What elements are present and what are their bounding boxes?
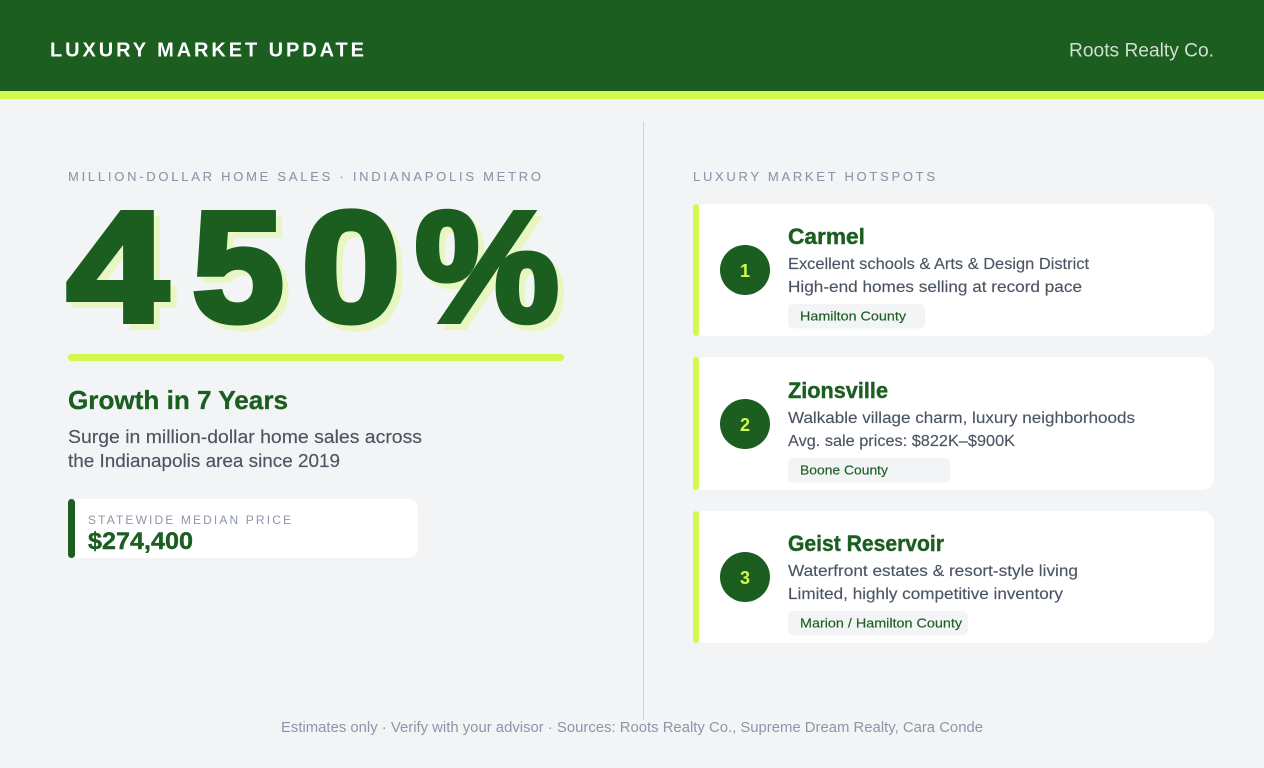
county tag	[788, 304, 925, 328]
accent underline	[68, 354, 564, 361]
Geist Reservoir text: Waterfront estates & resort-style living	[788, 563, 1078, 580]
brand name: Roots Realty Co.	[1069, 40, 1214, 62]
hotspots label: LUXURY MARKET HOTSPOTS	[693, 169, 935, 184]
Zionsville text: Walkable village charm, luxury neighborhoods	[788, 410, 1135, 427]
Zionsville text	[788, 378, 1135, 450]
Geist Reservoir text	[788, 531, 1078, 603]
Carmel text: High-end homes selling at record pace	[788, 279, 1082, 296]
eyebrow label: MILLION-DOLLAR HOME SALES · INDIANAPOLIS METRO	[68, 169, 541, 184]
rank badge 1: 1	[740, 261, 750, 281]
median price card	[68, 499, 418, 558]
big number shadow and value: 5	[198, 186, 290, 361]
description: the Indianapolis area since 2019	[68, 451, 340, 471]
Carmel text: Carmel	[788, 224, 865, 249]
big number shadow and value: %	[415, 180, 559, 355]
divider	[643, 122, 644, 720]
subheading: Growth in 7 Years	[68, 385, 288, 415]
big number shadow and value: 0	[308, 186, 406, 361]
panel: left statistic	[67, 169, 565, 558]
rank badge 1	[720, 245, 770, 295]
header band	[0, 0, 1264, 99]
median label: STATEWIDE MEDIAN PRICE	[88, 513, 291, 527]
county tag	[788, 458, 950, 482]
Carmel text	[788, 224, 1090, 296]
big number shadow and value: 5	[192, 180, 284, 355]
big number shadow and value: %	[421, 186, 565, 361]
card: Zionsville	[693, 357, 1214, 490]
Zionsville text: Avg. sale prices: $822K–$900K	[788, 433, 1015, 450]
Zionsville text: Zionsville	[788, 378, 888, 403]
big number shadow and value: 0	[302, 180, 400, 355]
county tag: Hamilton County	[800, 308, 907, 324]
median value: $274,400	[88, 528, 193, 555]
county tag: Boone County	[800, 462, 889, 478]
footer note: Estimates only · Verify with your advisor · Sources: Roots Realty Co., Supreme Dream Realty, Cara Conde	[281, 719, 983, 736]
card: Carmel	[693, 204, 1214, 336]
Geist Reservoir text: Geist Reservoir	[788, 531, 944, 556]
header title: LUXURY MARKET UPDATE	[50, 40, 364, 62]
panel: hotspots	[693, 169, 1214, 643]
rank badge 2: 2	[740, 415, 750, 435]
big number shadow and value: 4	[73, 186, 174, 361]
big number shadow and value	[67, 180, 565, 361]
rank badge 2	[720, 399, 770, 449]
Carmel text: Excellent schools & Arts & Design District	[788, 256, 1090, 273]
rank badge 3: 3	[740, 568, 750, 588]
county tag	[788, 611, 968, 636]
description	[68, 427, 422, 471]
big number shadow and value: 4	[67, 180, 168, 355]
Geist Reservoir text: Limited, highly competitive inventory	[788, 586, 1063, 603]
card: Geist Reservoir	[693, 511, 1214, 643]
rank badge 3	[720, 552, 770, 602]
county tag: Marion / Hamilton County	[800, 616, 963, 630]
description: Surge in million-dollar home sales across	[68, 427, 422, 447]
